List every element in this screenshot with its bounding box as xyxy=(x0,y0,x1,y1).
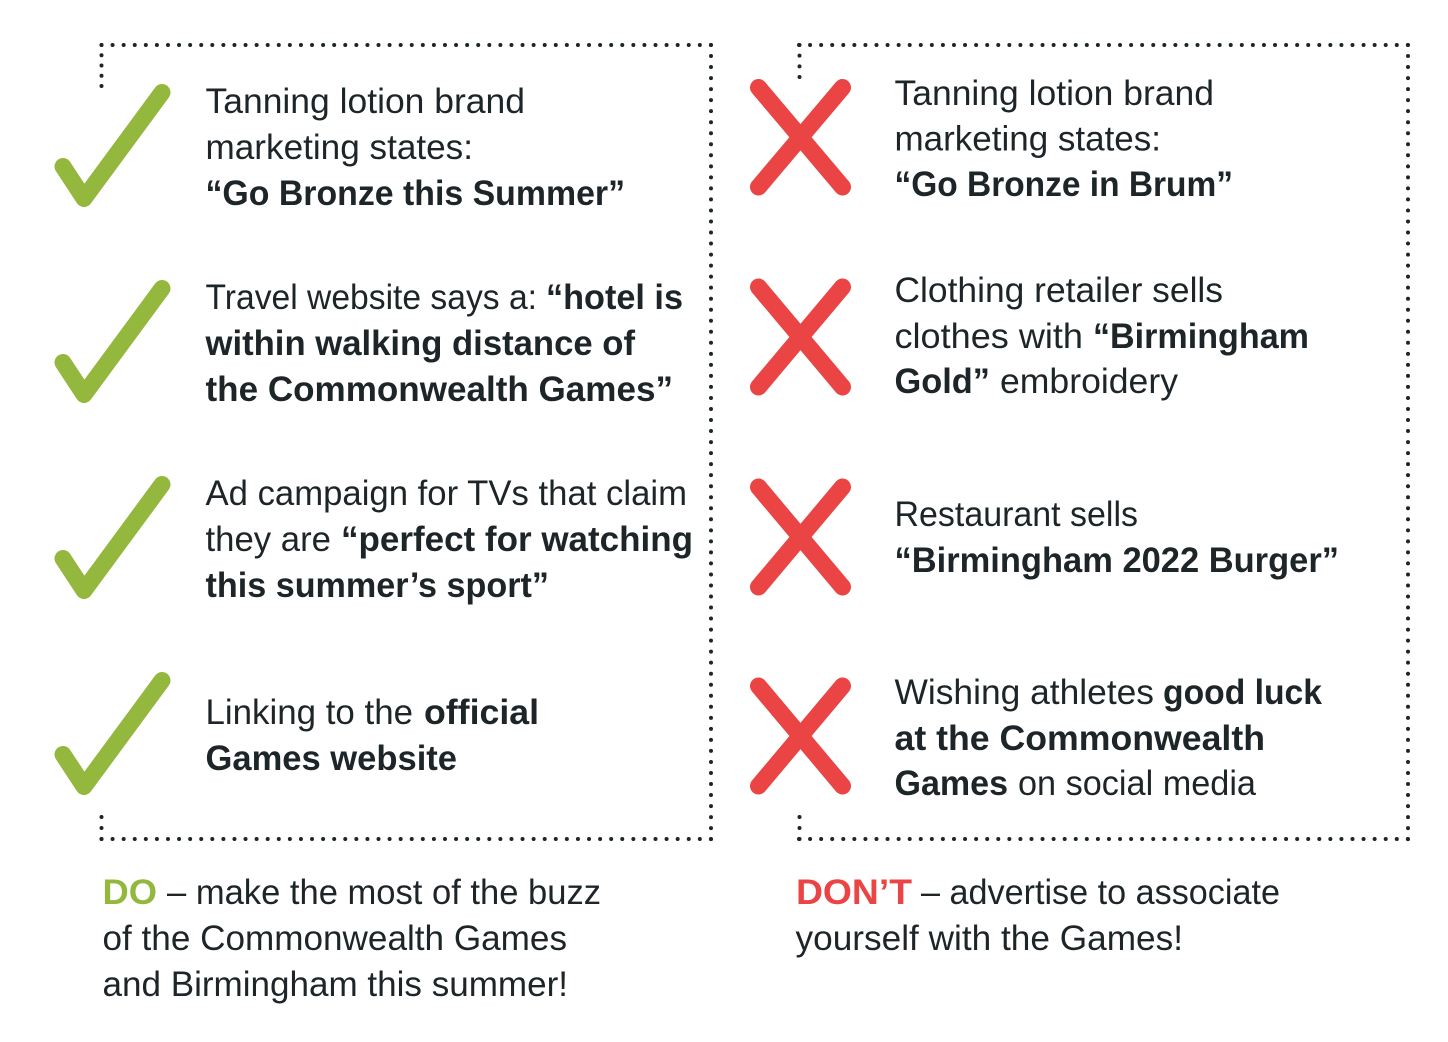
icon: check 4 xyxy=(63,680,162,786)
text: do item 3: this summer’s sport” xyxy=(206,566,549,605)
text: do item 2: “hotel is xyxy=(546,278,683,317)
text: do item 3 xyxy=(206,474,693,605)
text: don't item 1: Tanning lotion brand xyxy=(894,74,1214,113)
text: do item 2: within walking distance of xyxy=(205,324,635,363)
caption: do: of the Commonwealth Games xyxy=(102,919,567,958)
text: do item 2: the Commonwealth Games” xyxy=(206,370,673,409)
text: don't item 4: good luck xyxy=(1163,673,1323,712)
caption: do: and Birmingham this summer! xyxy=(102,965,568,1004)
text: don't item 3 xyxy=(894,495,1339,580)
caption: do: DO xyxy=(102,873,157,912)
text: don't item 2: “Birmingham xyxy=(1093,317,1309,356)
text: do item 1: “Go Bronze this Summer” xyxy=(206,174,625,213)
caption: don't: yourself with the Games! xyxy=(796,919,1183,958)
text: don't item 3: Restaurant sells xyxy=(894,495,1138,534)
text: do item 2 xyxy=(205,278,683,409)
caption: do: – make the most of the buzz xyxy=(167,873,601,912)
text: do item 1: Tanning lotion brand xyxy=(206,82,525,121)
text: don't item 2 xyxy=(894,271,1309,401)
text: do item 4: official xyxy=(424,693,539,732)
icon: cross 2 xyxy=(758,287,842,387)
text: do item 1: marketing states: xyxy=(206,128,473,167)
icon: check 1 xyxy=(63,92,162,198)
caption: do xyxy=(102,873,601,1004)
caption: don't: – advertise to associate xyxy=(921,873,1280,912)
icon: check 2 xyxy=(63,288,162,394)
icon: check 3 xyxy=(63,484,162,590)
text: don't item 1 xyxy=(894,74,1233,204)
text: do item 4: Linking to the xyxy=(206,693,413,732)
text: do item 3: they are xyxy=(206,520,331,559)
text: don't item 2: clothes with xyxy=(894,317,1083,356)
text: don't item 3: “Birmingham 2022 Burger” xyxy=(894,541,1339,580)
text: do item 3: “perfect for watching xyxy=(341,520,693,559)
icon: cross 1 xyxy=(758,88,842,187)
text: don't item 1: “Go Bronze in Brum” xyxy=(894,165,1233,204)
text: don't item 2: Clothing retailer sells xyxy=(894,271,1223,310)
text: don't item 2: embroidery xyxy=(1000,362,1178,401)
icon: cross 3 xyxy=(758,487,842,587)
text: don't item 4: at the Commonwealth xyxy=(894,719,1265,758)
text: don't item 2: Gold” xyxy=(894,362,990,401)
caption: don't xyxy=(796,873,1280,958)
text: do item 2: Travel website says a: xyxy=(206,278,537,317)
text: do item 4 xyxy=(206,693,539,778)
text: do item 1 xyxy=(206,82,625,213)
panel: do xyxy=(63,45,712,840)
caption: don't: DON’T xyxy=(796,873,912,912)
text: do item 4: Games website xyxy=(206,739,457,778)
text: do item 3: Ad campaign for TVs that claim xyxy=(206,474,687,513)
panel: don't xyxy=(758,45,1408,840)
text: don't item 4 xyxy=(894,673,1323,803)
icon: cross 4 xyxy=(758,686,842,786)
text: don't item 4: on social media xyxy=(1018,764,1257,803)
text: don't item 4: Wishing athletes xyxy=(894,673,1154,712)
text: don't item 4: Games xyxy=(894,764,1008,803)
text: don't item 1: marketing states: xyxy=(894,120,1161,158)
